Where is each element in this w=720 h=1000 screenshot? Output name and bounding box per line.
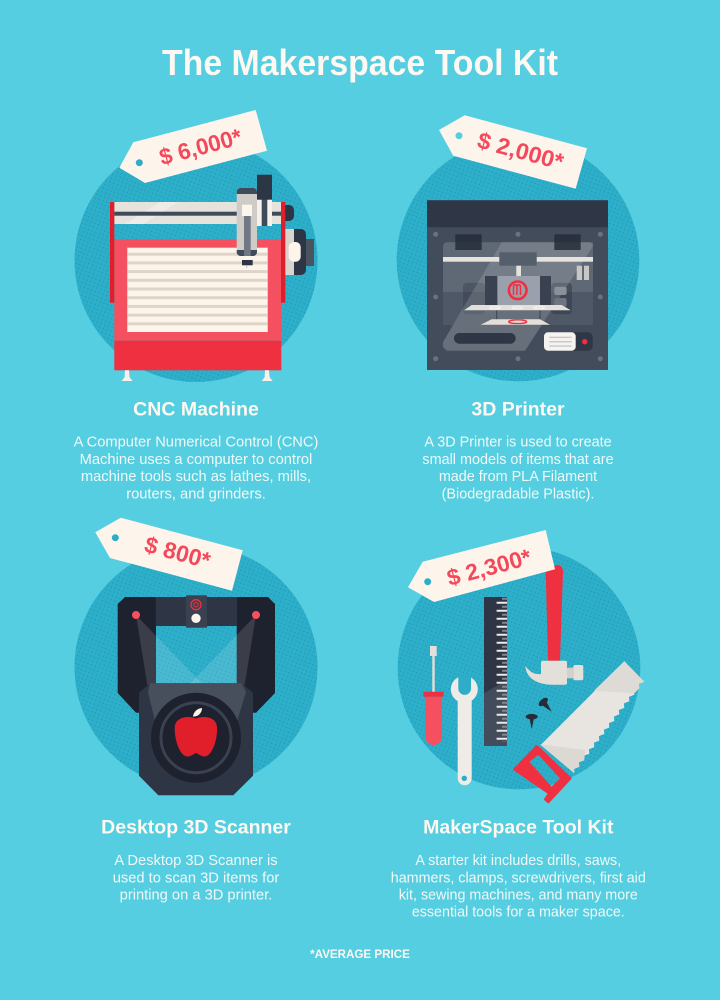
- description: printing on a 3D printer.: [120, 887, 272, 903]
- description: kit, sewing machines, and many more: [399, 887, 638, 903]
- icon: hammer: [525, 565, 583, 685]
- price tag: [408, 530, 555, 602]
- description: hammers, clamps, screwdrivers, first aid: [391, 870, 646, 886]
- background circle: [397, 139, 639, 381]
- icon: nails: [526, 696, 552, 729]
- title: The Makerspace Tool Kit: [162, 42, 558, 83]
- description: Machine uses a computer to control: [80, 452, 312, 468]
- icon: saw: [514, 661, 644, 802]
- description: A 3D Printer is used to create: [424, 435, 612, 451]
- heading: Desktop 3D Scanner: [101, 816, 291, 838]
- description: used to scan 3D items for: [113, 870, 279, 886]
- illustration: 3D scanner: [118, 595, 275, 795]
- heading: CNC Machine: [133, 398, 259, 420]
- description: small models of items that are: [422, 452, 614, 468]
- background circle: [398, 547, 640, 789]
- panel: makerspace tool kit: [391, 530, 646, 920]
- heading: MakerSpace Tool Kit: [423, 816, 614, 838]
- description: made from PLA Filament: [439, 469, 597, 485]
- description: essential tools for a maker space.: [412, 904, 625, 920]
- description: A Desktop 3D Scanner is: [114, 853, 278, 869]
- heading: 3D Printer: [471, 398, 565, 420]
- price tag: [119, 110, 267, 183]
- icon: wrench: [451, 675, 478, 785]
- panel: CNC machine: [74, 110, 318, 502]
- illustration: CNC machine: [110, 175, 314, 381]
- description: routers, and grinders.: [126, 486, 266, 502]
- description: A starter kit includes drills, saws,: [415, 853, 621, 869]
- icon: ruler: [484, 597, 507, 746]
- background circle: [74, 546, 318, 788]
- price tag: [95, 518, 243, 591]
- price tag: $ 2,000*: [475, 127, 566, 175]
- description: A Computer Numerical Control (CNC): [74, 435, 318, 451]
- illustration: 3D printer: [427, 200, 608, 370]
- price tag: [439, 115, 587, 189]
- icon: apple: [175, 708, 217, 757]
- price tag: $ 6,000*: [156, 123, 244, 170]
- description: (Biodegradable Plastic).: [442, 486, 594, 502]
- description: machine tools such as lathes, mills,: [81, 469, 311, 485]
- price tag: $ 2,300*: [444, 544, 534, 591]
- panel: desktop 3D scanner: [74, 518, 318, 903]
- footnote: *AVERAGE PRICE: [310, 948, 410, 961]
- background circle: [74, 139, 318, 382]
- panel: 3D printer: [397, 115, 639, 502]
- price tag: $ 800*: [142, 531, 213, 574]
- icon: screwdriver: [423, 646, 444, 745]
